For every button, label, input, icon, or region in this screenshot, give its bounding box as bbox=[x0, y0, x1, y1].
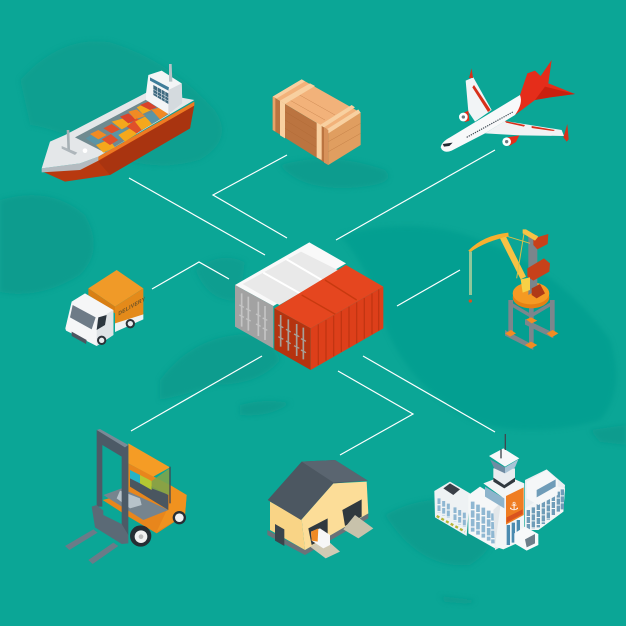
control tower bbox=[493, 468, 515, 488]
orange banner bbox=[506, 487, 524, 525]
warehouse foundation bbox=[267, 513, 368, 555]
central tower bbox=[483, 475, 524, 549]
entrance bbox=[514, 527, 538, 551]
red container top bbox=[274, 265, 383, 328]
icon: warehouse bbox=[267, 460, 373, 558]
icon: airplane bbox=[441, 60, 575, 152]
small truck at dock bbox=[311, 528, 330, 548]
truck label: DELIVERY bbox=[118, 296, 145, 318]
crane turntable bbox=[513, 286, 549, 308]
red container door bbox=[274, 308, 311, 370]
antenna bbox=[500, 434, 506, 458]
truck cab bbox=[65, 293, 113, 346]
grey container end bbox=[235, 285, 273, 348]
central shipping containers bbox=[235, 242, 383, 370]
crate straps bbox=[273, 79, 361, 165]
icon: port office building bbox=[434, 434, 565, 551]
forklift mast bbox=[97, 429, 128, 448]
forklift wheels bbox=[130, 525, 151, 547]
icon: delivery truck bbox=[65, 270, 145, 346]
plane engines bbox=[459, 111, 519, 146]
ship containers bbox=[86, 102, 168, 153]
forklift forks bbox=[65, 529, 98, 550]
forklift roof bbox=[128, 443, 170, 477]
warehouse docks bbox=[308, 518, 328, 545]
icon: forklift bbox=[65, 429, 187, 564]
warehouse side door bbox=[275, 524, 284, 546]
red container side bbox=[311, 287, 383, 370]
right curved wing bbox=[525, 469, 565, 530]
icon: port office building: ⚓ bbox=[509, 499, 519, 513]
crate wood grain bbox=[285, 93, 361, 152]
connector lines bbox=[129, 150, 495, 455]
ship hull bbox=[43, 103, 194, 182]
ship bridge bbox=[146, 71, 182, 114]
plane tail bbox=[515, 60, 575, 115]
truck cargo box bbox=[88, 270, 143, 307]
crane boom bbox=[468, 233, 509, 252]
left wing bbox=[434, 482, 470, 536]
crane tower bbox=[528, 235, 537, 295]
forklift body bbox=[103, 463, 187, 533]
plane upper wing bbox=[466, 77, 492, 122]
ship deck bbox=[42, 157, 98, 172]
crane cable and hook bbox=[469, 252, 472, 295]
truck wheels bbox=[97, 336, 106, 345]
shrubs bbox=[437, 516, 465, 532]
warehouse roof bbox=[268, 460, 368, 520]
plane lower wing bbox=[485, 121, 564, 136]
icon: port crane bbox=[468, 229, 558, 350]
plane fuselage bbox=[441, 95, 521, 152]
middle block bbox=[468, 487, 502, 548]
icon: cargo ship bbox=[42, 64, 194, 182]
forklift cabin glass bbox=[130, 475, 168, 510]
crane feet bbox=[505, 317, 558, 349]
white container bbox=[235, 242, 346, 306]
icon: wooden crate bbox=[273, 79, 361, 165]
crane cabin bbox=[521, 277, 530, 293]
ship mast and bow bbox=[62, 146, 77, 155]
crane base legs bbox=[505, 300, 555, 350]
warehouse walls bbox=[270, 502, 305, 550]
crane counterweights bbox=[533, 234, 548, 249]
